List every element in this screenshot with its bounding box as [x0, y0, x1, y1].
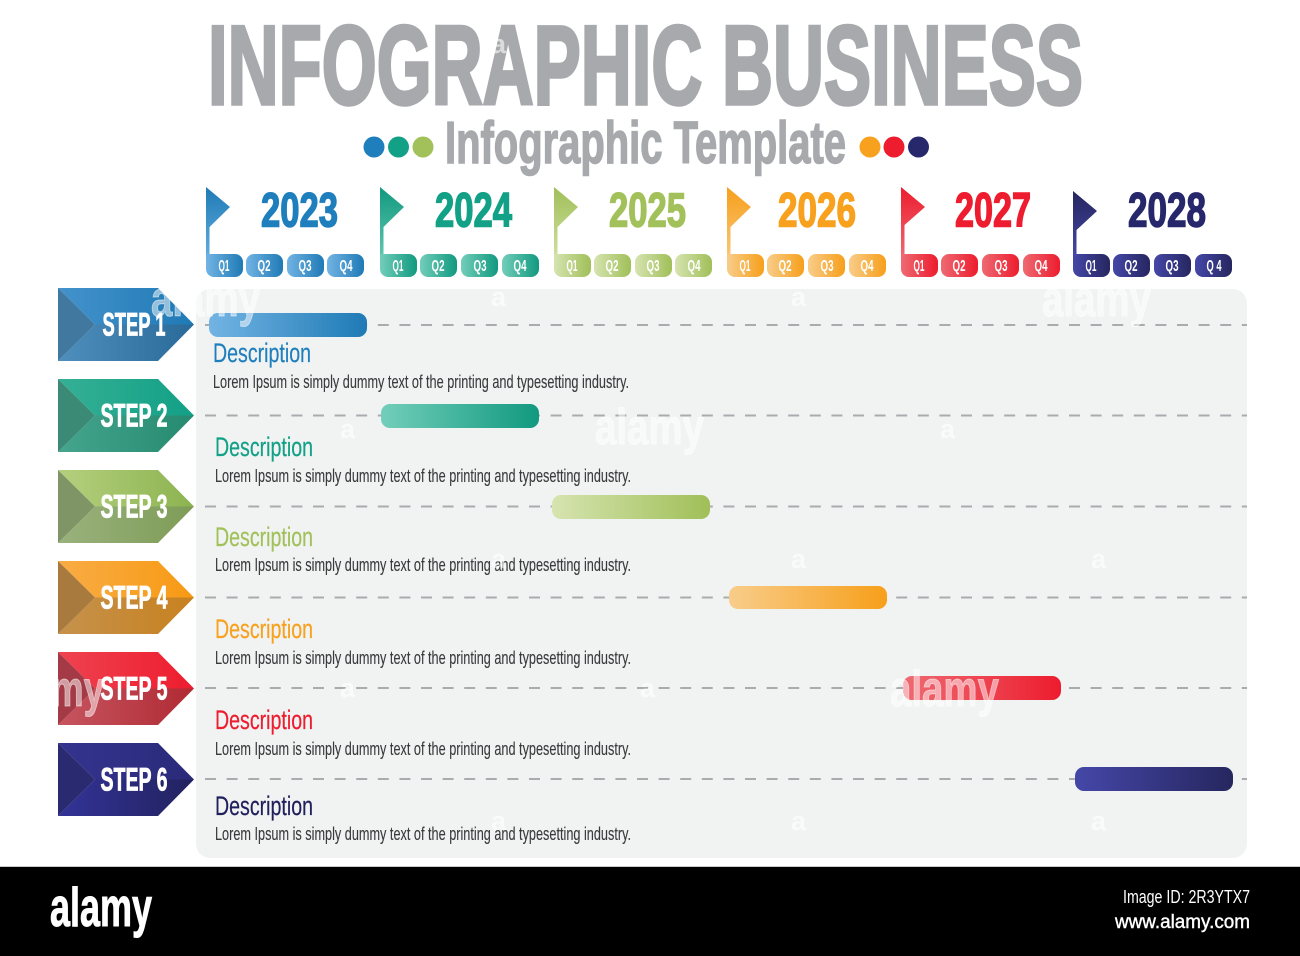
quarters 2024: Q2 [432, 258, 445, 275]
step 5 description [215, 705, 631, 759]
quarters 2023 [206, 254, 364, 277]
watermarks: a [791, 806, 807, 836]
timeline header: 2028 [1073, 184, 1232, 277]
step 4 description: Lorem Ipsum is simply dummy text of the printing and typesetting industry. [215, 647, 631, 668]
quarters 2027 [901, 254, 1060, 277]
row 2: step 2 [58, 379, 1247, 486]
timeline header: 2024 [380, 184, 539, 277]
timeline header: 2026 [727, 184, 886, 277]
subtitle: Infographic Template [445, 110, 846, 176]
footer logo: alamy [50, 876, 152, 938]
quarters 2023: Q3 [298, 258, 312, 275]
step 4 arrow [58, 561, 194, 634]
quarters 2023: Q4 [340, 258, 353, 275]
step 3 arrow: STEP 3 [100, 489, 168, 525]
quarters 2028: Q 4 [1206, 258, 1222, 275]
panel: gantt background [196, 289, 1247, 858]
quarters 2028 [1073, 254, 1232, 277]
step 5 arrow [58, 652, 194, 725]
quarters 2027: Q4 [1034, 258, 1048, 275]
step 5 description: Lorem Ipsum is simply dummy text of the printing and typesetting industry. [215, 738, 631, 759]
quarters 2024: Q4 [514, 258, 527, 275]
quarters 2028: Q3 [1166, 258, 1179, 275]
step 1 arrow: STEP 1 [102, 307, 166, 343]
year 2027: 2027 [955, 184, 1031, 238]
flag 2024 [380, 187, 404, 258]
step 1 description: Lorem Ipsum is simply dummy text of the printing and typesetting industry. [213, 371, 629, 392]
row 1: step 1 [58, 288, 1247, 392]
step 6 arrow [58, 743, 194, 816]
watermarks: a [1091, 544, 1107, 574]
year 2023: 2023 [261, 184, 338, 238]
quarters 2026: Q2 [778, 258, 792, 275]
step 6 description: Description [215, 791, 313, 821]
watermarks: a [340, 414, 356, 444]
step 3 description [215, 522, 631, 575]
row 4: step 4 [58, 561, 1247, 668]
step 2 description: Description [215, 432, 313, 462]
quarters 2028: Q2 [1124, 258, 1138, 275]
quarters 2023: Q2 [258, 258, 271, 275]
watermarks [0, 29, 1151, 836]
year 2026: 2026 [778, 184, 856, 238]
row 6: step 6 [58, 743, 1247, 844]
step 2 arrow [58, 379, 194, 452]
step 6 description: Lorem Ipsum is simply dummy text of the printing and typesetting industry. [215, 823, 631, 844]
step 1 description: Description [213, 338, 311, 368]
quarters 2026: Q3 [820, 258, 834, 275]
footer bar [0, 866, 1300, 956]
step 4 bar [729, 586, 887, 609]
footer image id: www.alamy.com [1114, 912, 1250, 933]
watermarks: a [1091, 806, 1107, 836]
quarters 2026: Q1 [740, 258, 751, 275]
watermarks: alamy [595, 399, 704, 455]
row 5: step 5 [58, 652, 1247, 759]
step 5 bar [903, 676, 1061, 700]
watermarks: alamy [0, 661, 104, 717]
footer image id [1114, 887, 1250, 933]
flag 2027 [901, 187, 925, 258]
flag 2025 [554, 187, 578, 258]
quarters 2027: Q1 [914, 258, 925, 275]
step 6 description [215, 791, 631, 844]
quarters 2024: Q3 [474, 258, 487, 275]
step 4 description: Description [215, 614, 313, 644]
step 6 arrow: STEP 6 [100, 762, 168, 798]
step 3 description: Description [215, 522, 313, 552]
watermarks: a [340, 673, 356, 703]
quarters 2027: Q3 [994, 258, 1008, 275]
footer image id: Image ID: 2R3YTX7 [1123, 887, 1250, 907]
step 4 description [215, 614, 631, 668]
step 1 bar [209, 313, 367, 337]
timeline header: 2023 [206, 184, 364, 277]
quarters 2025: Q1 [566, 258, 578, 275]
watermarks: a [791, 282, 807, 312]
row 3: step 3 [58, 470, 1247, 575]
step 1 arrow [58, 288, 194, 361]
watermarks: a [491, 806, 507, 836]
watermarks: alamy [1042, 271, 1151, 327]
step 2 arrow: STEP 2 [100, 398, 168, 434]
step 6 bar [1075, 767, 1233, 791]
quarters 2023: Q1 [218, 258, 230, 275]
step 3 bar [552, 495, 710, 519]
step 3 description: Lorem Ipsum is simply dummy text of the printing and typesetting industry. [215, 554, 631, 575]
flag 2026 [727, 187, 751, 258]
decorative dots: right [860, 136, 929, 158]
quarters 2025: Q4 [688, 258, 701, 275]
watermarks: a [791, 544, 807, 574]
step 3 arrow [58, 470, 194, 543]
step 1 description [213, 338, 629, 392]
step 5 description: Description [215, 705, 313, 735]
timeline header: 2025 [554, 184, 712, 277]
watermarks: a [491, 29, 507, 59]
quarters 2025: Q2 [606, 258, 619, 275]
quarters 2025 [554, 254, 712, 277]
quarters 2027: Q2 [952, 258, 966, 275]
watermarks: a [940, 414, 956, 444]
decorative dots: left [364, 136, 434, 158]
quarters 2024: Q1 [392, 258, 404, 275]
year 2028: 2028 [1128, 184, 1206, 238]
quarters 2028: Q1 [1086, 258, 1097, 275]
flag 2028 [1073, 191, 1097, 258]
quarters 2025: Q3 [646, 258, 660, 275]
quarters 2024 [380, 254, 539, 277]
year 2025: 2025 [609, 184, 686, 238]
flag 2023 [206, 187, 230, 258]
step 2 description [215, 432, 631, 486]
step 2 description: Lorem Ipsum is simply dummy text of the printing and typesetting industry. [215, 465, 631, 486]
year 2024: 2024 [435, 184, 512, 238]
step 2 bar [381, 404, 539, 428]
watermarks: a [640, 673, 656, 703]
watermarks: alamy [890, 661, 999, 717]
timeline header: 2027 [901, 184, 1060, 277]
step 4 arrow: STEP 4 [100, 580, 168, 616]
watermarks: a [491, 282, 507, 312]
quarters 2026: Q4 [860, 258, 874, 275]
watermarks: alamy [151, 271, 260, 327]
quarters 2026 [727, 254, 886, 277]
step 5 arrow: STEP 5 [100, 671, 168, 707]
watermarks: a [491, 544, 507, 574]
